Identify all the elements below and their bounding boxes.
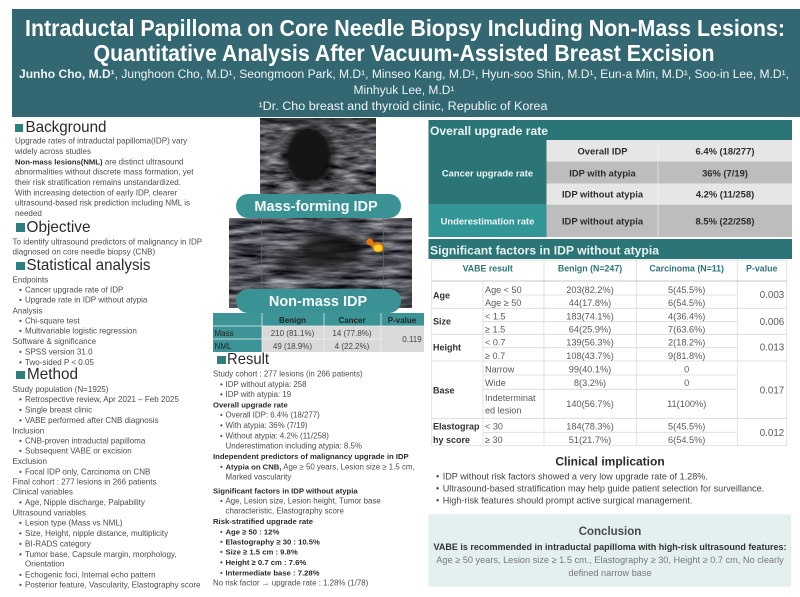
panel: statistical analysis: • (19, 327, 22, 336)
authors (19, 69, 789, 113)
panel: result: Age, Lesion size, Lesion height, Tumor base (226, 496, 381, 505)
panel: method: Single breast clinic (25, 405, 92, 414)
panel: method: • (19, 529, 22, 538)
panel: background: ultrasound-based risk prediction including NML is (15, 199, 190, 208)
table: significant factors in IDP without atypia (432, 260, 787, 446)
table: mass vs NML: 210 (81.1%) (271, 329, 315, 338)
panel: method: Method (27, 366, 78, 383)
table: mass vs NML: Benign (279, 316, 306, 325)
panel: statistical analysis: Upgrade rate in IDP without atypia (25, 296, 148, 305)
table: significant factors in IDP without atypia: 99(40.1%) (569, 364, 611, 374)
table: overall upgrade rate: IDP without atypia (562, 188, 644, 200)
authors: ¹Dr. Cho breast and thyroid clinic, Republic of Korea (258, 101, 548, 113)
table: significant factors in IDP without atypia: Height (433, 342, 461, 352)
panel: method: Posterior feature, Vascularity, Elastography score (25, 581, 201, 590)
panel: result: Height ≥ 0.7 cm : 7.6% (226, 558, 306, 567)
panel: clinical implication: High-risk features should prompt active surgical management. (443, 496, 692, 506)
table: mass vs NML: 0.119 (402, 335, 422, 344)
authors: Junho Cho, M.D¹ , Junghoon Cho, M.D¹, Seongmoon Park, M.D¹, Minseo Kang, M.D¹, Hyun-soo Shin, M.D¹, Eun-a Min, M.D¹, Soo-in Lee, M.D¹, (19, 69, 789, 81)
panel: method: • (19, 395, 22, 404)
panel: method: Orientation (25, 560, 64, 569)
icon: statistical analysis square (16, 262, 25, 270)
image: mass-forming ultrasound (260, 118, 376, 194)
panel: statistical analysis: • (19, 347, 22, 356)
panel: background: Non-mass lesions(NML) are distinct ultrasound (15, 157, 184, 166)
table: significant factors in IDP without atypia: Benign (N=247) (558, 264, 622, 274)
table: significant factors in IDP without atypia: < 0.7 (485, 338, 505, 348)
panel: result: characteristic, Elastography score (226, 507, 345, 516)
table: significant factors in IDP without atypia: Size (433, 316, 451, 326)
icon: background square (15, 124, 23, 132)
panel: clinical implication: • (436, 484, 439, 494)
panel: background: widely across studies (14, 147, 91, 156)
panel: method: Focal IDP only, Carcinoma on CNB (25, 467, 150, 476)
panel: background: With increasing detection of early IDP, clearer (15, 188, 178, 197)
panel: statistical analysis: Chi-square test (25, 317, 80, 326)
table: overall upgrade rate: IDP with atypia (569, 168, 637, 178)
table: significant factors in IDP without atypia: Age < 50 (485, 285, 522, 295)
panel: method: • (19, 570, 22, 579)
panel: objective: To identify ultrasound predictors of malignancy in IDP (12, 237, 202, 246)
table: significant factors in IDP without atypia: hy score (433, 435, 470, 445)
panel: method: • (19, 436, 22, 445)
table: mass vs NML: Cancer (338, 316, 366, 325)
panel: result: • (220, 537, 223, 546)
panel: method: BI-RADS category (25, 539, 91, 548)
panel: result: No risk factor → upgrade rate : 1.28% (1/78) (213, 579, 369, 588)
panel: statistical analysis: • (19, 358, 22, 367)
panel: result: Size ≥ 1.5 cm : 9.8% (226, 548, 298, 557)
panel: statistical analysis: Analysis (12, 306, 42, 315)
panel: result: • (220, 548, 223, 557)
label pill: non-mass IDP: Non-mass IDP (269, 294, 367, 310)
table: overall upgrade rate: Overall IDP (577, 146, 628, 156)
panel: background: abnormalities without discrete mass formation, yet (15, 168, 194, 177)
panel: method: • (19, 519, 22, 528)
table: overall upgrade rate: 6.4% (18/277) (696, 146, 754, 156)
image: non-mass ultrasound (229, 218, 412, 308)
panel: method: Age, Nipple discharge, Palpability (25, 498, 145, 507)
table: significant factors in IDP without atypia: VABE result (463, 264, 513, 274)
table: significant factors in IDP without atypia: 183(74.1%) (566, 312, 614, 322)
table: significant factors in IDP without atypia: 9(81.8%) (668, 351, 705, 361)
panel: method: • (19, 581, 22, 590)
table: significant factors in IDP without atypia: 108(43.7%) (566, 351, 614, 361)
panel: result: Underestimation including atypia: 8.5% (226, 442, 362, 451)
header banner (12, 9, 800, 117)
panel: background: Background (26, 119, 106, 136)
panel: conclusion: VABE is recommended in intraductal papilloma with high-risk ultrasound features: (434, 542, 787, 552)
panel: statistical analysis: • (19, 317, 22, 326)
panel: result: • (220, 462, 223, 471)
table: significant factors in IDP without atypia: 203(82.2%) (566, 285, 614, 295)
panel: result: Overall IDP: 6.4% (18/277) (226, 411, 320, 420)
label pill: non-mass IDP (236, 289, 401, 313)
table: significant factors in IDP without atypia: 8(3.2%) (574, 378, 606, 388)
table: overall upgrade rate: 8.5% (22/258) (696, 216, 754, 226)
table: mass vs NML: NML (214, 342, 232, 351)
table: significant factors in IDP without atypia: < 30 (485, 422, 503, 432)
panel: method: Inclusion (12, 426, 44, 435)
panel: clinical implication: Clinical implication (555, 455, 665, 469)
table: significant factors in IDP without atypia: 4(36.4%) (668, 312, 705, 322)
panel: result: Study cohort : 277 lesions (in 266 patients) (213, 370, 363, 379)
panel: clinical implication (436, 455, 764, 506)
table: significant factors in IDP without atypia: 6(54.5%) (668, 435, 705, 445)
panel: method: Exclusion (12, 457, 47, 466)
panel: result: Intermediate base : 7.28% (226, 568, 320, 577)
panel: result: • (220, 380, 223, 389)
table: significant factors in IDP without atypia: 5(45.5%) (668, 422, 705, 432)
panel: method: • (19, 447, 22, 456)
panel: statistical analysis: • (19, 296, 22, 305)
panel: method: Final cohort : 277 lesions in 266 patients (12, 477, 157, 486)
panel: statistical analysis: Two-sided P < 0.05 (25, 358, 94, 367)
table: mass vs NML (213, 313, 424, 352)
panel: objective: Objective (26, 219, 91, 236)
table: mass vs NML: Mass (214, 329, 234, 338)
panel: result: Overall upgrade rate (213, 400, 288, 409)
panel: result: Marked vascularity (226, 472, 291, 481)
table: significant factors in IDP without atypia: 44(17.8%) (569, 298, 611, 308)
table: significant factors in IDP without atypia: 2(18.2%) (668, 338, 705, 348)
panel: statistical analysis: Statistical analysis (26, 257, 150, 274)
table: significant factors in IDP without atypia: 5(45.5%) (668, 285, 705, 295)
panel: objective: diagnosed on core needle biopsy (CNB) (12, 247, 156, 256)
panel: method: VABE performed after CNB diagnosis (25, 416, 159, 425)
panel: conclusion: Age ≥ 50 years, Lesion size ≥ 1.5 cm., Elastography ≥ 30, Height ≥ 0.7 cm, No clearly (436, 555, 784, 565)
table: significant factors in IDP without atypia: Base (433, 386, 455, 396)
panel: result: • (220, 527, 223, 536)
panel: background: their risk stratification remains unstandardized. (15, 178, 181, 187)
table: mass vs NML: 4 (22.2%) (335, 342, 370, 351)
panel: method: Subsequent VABE or excision (25, 447, 132, 456)
icon: method square (16, 371, 25, 379)
icon: objective square (16, 223, 25, 232)
panel: result: IDP without atypia: 258 (226, 380, 307, 389)
panel: clinical implication: Ultrasound-based stratification may help guide patient selection for surveillance. (443, 484, 764, 494)
panel: result: • (220, 431, 223, 440)
title (25, 15, 785, 66)
table: significant factors in IDP without atypia: ≥ 30 (485, 435, 503, 445)
heading: overall upgrade rate: Overall upgrade rate (430, 126, 548, 138)
panel: result: IDP with atypia: 19 (226, 390, 292, 399)
panel: result: Elastography ≥ 30 : 10.5% (226, 537, 320, 546)
panel: method: Ultrasound variables (12, 508, 86, 517)
table: significant factors in IDP without atypia: 0.006 (760, 317, 785, 328)
panel: conclusion (428, 514, 791, 587)
panel: background: needed (15, 209, 42, 218)
panel: result: • (220, 558, 223, 567)
panel: method: • (19, 539, 22, 548)
panel: method: • (19, 498, 22, 507)
panel: result: • (220, 390, 223, 399)
panel: result (213, 351, 415, 588)
panel: method: Size, Height, nipple distance, multiplicity (25, 529, 168, 538)
panel: result: Without atypia: 4.2% (11/258) (226, 431, 329, 440)
panel: method (12, 366, 201, 590)
table: overall upgrade rate: 4.2% (11/258) (696, 188, 754, 200)
icon: result square (217, 356, 226, 364)
panel: method: • (19, 467, 22, 476)
table: significant factors in IDP without atypia: 0.017 (760, 386, 784, 396)
panel: statistical analysis: Cancer upgrade rate of IDP (25, 286, 123, 295)
table: significant factors in IDP without atypia: 0.003 (760, 290, 785, 301)
panel: method: CNB-proven intraductal papilloma (25, 436, 146, 445)
table: significant factors in IDP without atypia: 0 (684, 378, 689, 388)
table: overall upgrade rate (428, 140, 792, 237)
panel: result: • (220, 568, 223, 577)
table: significant factors in IDP without atypia: 139(56.3%) (566, 338, 614, 348)
panel: objective (12, 219, 202, 256)
panel: method: Echogenic foci, Internal echo pattern (25, 570, 156, 579)
icon: doppler signal (366, 238, 383, 252)
table: significant factors in IDP without atypia: ed lesion (485, 406, 521, 416)
panel: method: Clinical variables (12, 488, 73, 497)
panel: clinical implication: IDP without risk factors showed a very low upgrade rate of 1.28%. (443, 471, 708, 481)
panel: method: Retrospective review, Apr 2021 – Feb 2025 (25, 395, 179, 404)
table: mass vs NML: P-value (388, 316, 417, 325)
panel: method: Tumor base, Capsule margin, morphology, (25, 550, 177, 559)
panel: result: Atypia on CNB, Age ≥ 50 years, Lesion size ≥ 1.5 cm, (226, 462, 415, 471)
table: overall upgrade rate: Cancer upgrade rate (442, 168, 533, 178)
panel: background (14, 119, 194, 218)
panel: conclusion: Conclusion (579, 526, 641, 538)
table: significant factors in IDP without atypia: Indeterminat (485, 393, 536, 403)
authors: Minhyuk Lee, M.D¹ (354, 85, 455, 97)
panel: statistical analysis: Endpoints (12, 275, 48, 284)
table: significant factors in IDP without atypia: 64(25.9%) (569, 324, 611, 334)
heading: significant factors (428, 239, 792, 259)
panel: method: • (19, 416, 22, 425)
table: significant factors in IDP without atypia: Age ≥ 50 (485, 298, 521, 308)
table: significant factors in IDP without atypia: 0.013 (760, 342, 785, 354)
table: mass vs NML: 14 (77.8%) (332, 329, 372, 338)
table: significant factors in IDP without atypia: 140(56.7%) (566, 399, 614, 409)
panel: conclusion: defined narrow base (568, 568, 652, 578)
label pill: mass-forming IDP (236, 194, 401, 218)
heading: significant factors: Significant factors in IDP without atypia (430, 243, 659, 257)
table: significant factors in IDP without atypia: 0.012 (760, 428, 784, 439)
panel: method: • (19, 550, 22, 559)
panel: statistical analysis: • (19, 286, 22, 295)
panel: clinical implication: • (436, 496, 439, 506)
panel: method: • (19, 405, 22, 414)
panel: result: • (220, 496, 223, 505)
table: significant factors in IDP without atypia: Narrow (485, 364, 515, 374)
table: significant factors in IDP without atypia: Age (433, 290, 450, 300)
panel: result: Age ≥ 50 : 12% (226, 527, 279, 536)
table: significant factors in IDP without atypia: ≥ 1.5 (485, 324, 505, 334)
table: significant factors in IDP without atypia: 51(21.7%) (569, 435, 611, 445)
table: overall upgrade rate: Underestimation rate (441, 216, 534, 226)
table: significant factors in IDP without atypia: 0 (684, 364, 689, 374)
table: significant factors in IDP without atypia: < 1.5 (485, 312, 505, 322)
panel: result: Independent predictors of malignancy upgrade in IDP (213, 452, 409, 461)
table: significant factors in IDP without atypia: Wide (485, 378, 506, 388)
panel: result: • (220, 411, 223, 420)
panel: statistical analysis: SPSS version 31.0 (25, 347, 93, 356)
panel: method: Study population (N=1925) (12, 385, 109, 394)
table: significant factors in IDP without atypia: 7(63.6%) (668, 324, 705, 334)
table: significant factors in IDP without atypia: Elastograp (433, 422, 480, 432)
table: significant factors in IDP without atypia: 11(100%) (667, 399, 706, 409)
panel: result: Significant factors in IDP without atypia (213, 487, 358, 496)
table: mass vs NML: 49 (18.9%) (273, 342, 312, 351)
panel: statistical analysis: Multivariable logistic regression (25, 327, 137, 336)
panel: statistical analysis (12, 257, 150, 367)
title: Quantitative Analysis After Vacuum-Assisted Breast Excision (94, 40, 714, 66)
table: overall upgrade rate: IDP without atypia (562, 216, 644, 226)
panel: result: With atypia: 36% (7/19) (226, 421, 308, 430)
table: significant factors in IDP without atypia: P-value (746, 264, 777, 274)
panel: clinical implication: • (436, 471, 439, 481)
label pill: mass-forming IDP: Mass-forming IDP (254, 199, 378, 215)
panel: result: • (220, 421, 223, 430)
panel: background: Upgrade rates of intraductal papilloma(IDP) vary (15, 137, 187, 146)
panel: result: Result (227, 351, 270, 368)
table: significant factors in IDP without atypia: 6(54.5%) (668, 298, 705, 308)
table: significant factors in IDP without atypia: Carcinoma (N=11) (649, 264, 724, 274)
table: overall upgrade rate: 36% (7/19) (702, 168, 748, 178)
panel: statistical analysis: Software & significance (12, 337, 97, 346)
heading: overall upgrade rate (428, 120, 792, 140)
panel: result: Risk-stratified upgrade rate (213, 517, 314, 526)
table: significant factors in IDP without atypia: ≥ 0.7 (485, 351, 505, 361)
table: significant factors in IDP without atypia: 184(78.3%) (566, 422, 614, 432)
panel: method: Lesion type (Mass vs NML) (25, 519, 123, 528)
